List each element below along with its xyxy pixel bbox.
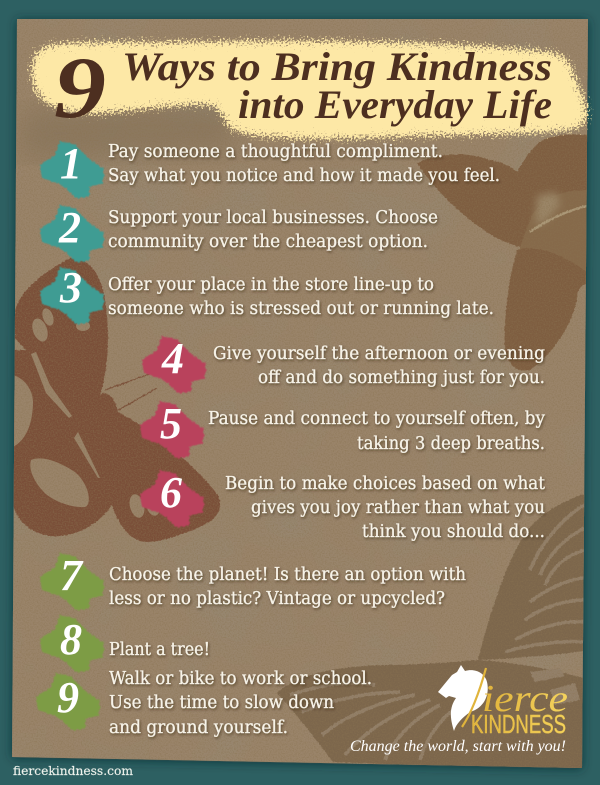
logo word fierce: ierce [482, 678, 568, 720]
text 7: Choose the planet! Is there an option with [109, 565, 466, 585]
item 3 [40, 263, 494, 324]
text 2 [108, 208, 438, 252]
title numeral 9: 9 [54, 40, 106, 137]
title line 2: into Everyday Life [238, 82, 552, 127]
text 2: Support your local businesses. Choose [108, 208, 438, 228]
text 7: less or no plastic? Vintage or upcycled? [109, 589, 445, 609]
text 5: Pause and connect to yourself often, by [208, 409, 545, 429]
badge 4: 4 [161, 334, 184, 383]
badge 5 [140, 399, 204, 458]
item 5 [140, 399, 545, 458]
text 9: Walk or bike to work or school. [109, 669, 372, 689]
text 6: gives you joy rather than what you [251, 498, 545, 518]
butterfly: top right [417, 134, 590, 371]
text 9 [109, 669, 372, 738]
badge 8: 8 [60, 615, 82, 664]
text 7 [109, 565, 466, 609]
item 8 [40, 615, 210, 672]
badge 4 [142, 334, 206, 393]
badge 1: 1 [60, 139, 82, 188]
logo tagline: Change the world, start with you! [350, 738, 566, 755]
badge 8 [40, 615, 104, 672]
badge 6 [140, 468, 204, 527]
text 1: Pay someone a thoughtful compliment. [108, 142, 443, 162]
text 1 [108, 142, 500, 186]
badge 9: 9 [57, 673, 79, 722]
logo: Fierce Kindness [350, 665, 568, 755]
text 2: community over the cheapest option. [108, 232, 428, 252]
title line 1: Ways to Bring Kindness [122, 44, 552, 89]
logo slash [462, 668, 486, 727]
text 3 [108, 275, 494, 319]
text 5: taking 3 deep breaths. [357, 434, 545, 454]
item 1 [40, 139, 500, 198]
badge 3: 3 [59, 263, 82, 312]
text 8: Plant a tree! [109, 640, 210, 660]
text 4: off and do something just for you. [258, 368, 545, 388]
item 9 [36, 669, 372, 738]
icon: white lion head [438, 665, 488, 731]
title banner: cream brush stroke [30, 40, 589, 140]
text 6: Begin to make choices based on what [225, 474, 545, 494]
badge 2: 2 [58, 203, 81, 252]
butterfly: left [12, 258, 220, 542]
text 1: Say what you notice and how it made you feel. [108, 166, 500, 186]
text 6 [225, 474, 545, 542]
text 4: Give yourself the afternoon or evening [213, 344, 545, 364]
badge 2 [40, 203, 104, 262]
badge 6: 6 [160, 468, 182, 517]
butterfly: bottom right [277, 492, 590, 772]
item 4 [142, 334, 545, 393]
logo word kindness: KINDNESS [471, 709, 566, 739]
badge 7 [40, 551, 104, 610]
badge 7: 7 [60, 551, 84, 600]
website url: fiercekindness.com [13, 763, 133, 778]
badge 3 [40, 263, 104, 324]
badge 5: 5 [160, 399, 182, 448]
text 4 [213, 344, 545, 388]
text 3: Offer your place in the store line-up to [108, 275, 434, 295]
badge 9 [36, 673, 100, 730]
butterfly spots [13, 307, 162, 519]
text 3: someone who is stressed out or running late. [108, 299, 494, 319]
item 2 [40, 203, 438, 262]
title [54, 40, 552, 137]
item 7 [40, 551, 466, 610]
text 5 [208, 409, 545, 454]
text 9: and ground yourself. [109, 718, 288, 738]
text 6: think you should do... [362, 522, 545, 542]
text 9: Use the time to slow down [109, 693, 334, 713]
item 6 [140, 468, 545, 542]
badge 1 [40, 139, 104, 198]
